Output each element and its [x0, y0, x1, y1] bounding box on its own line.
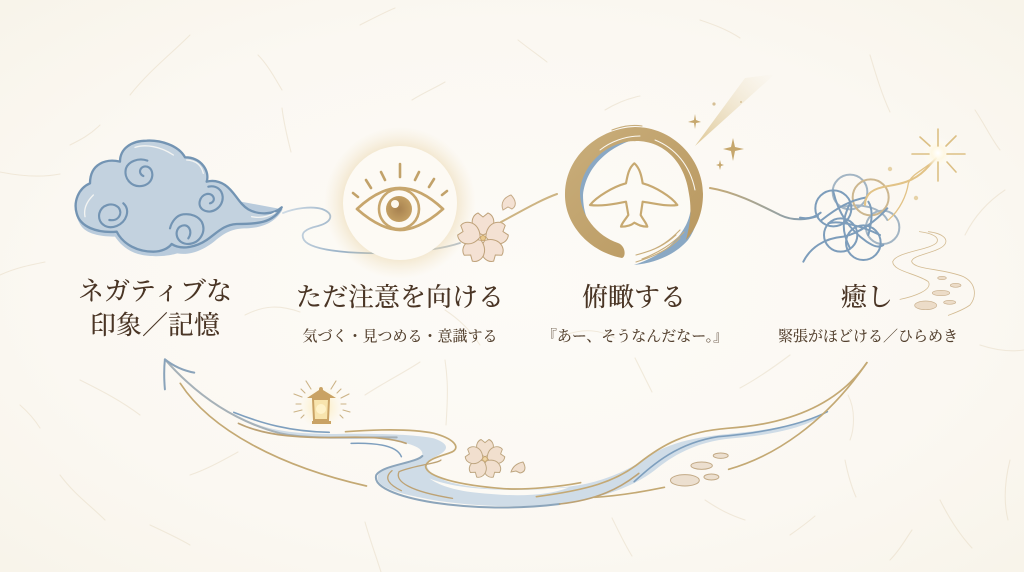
gold strands — [865, 158, 936, 220]
icon: eye — [324, 127, 476, 279]
white inner highlight — [350, 438, 569, 495]
enso blue stroke — [577, 138, 699, 265]
icon: small stream — [893, 232, 974, 315]
eye outline — [357, 188, 443, 230]
icon: lantern — [294, 381, 350, 429]
blue line inner — [351, 443, 401, 457]
connector: blossom to enso — [501, 194, 557, 222]
tan strand loop — [853, 179, 889, 215]
cloud swirls — [99, 160, 223, 244]
cloud highlights — [85, 146, 275, 217]
icon: light beam — [695, 74, 775, 146]
eye disc — [343, 146, 457, 260]
thread: cloud to flower — [283, 208, 460, 253]
thread: enso to knot — [710, 188, 818, 219]
right gold bank — [536, 363, 867, 497]
bird icon — [590, 163, 677, 227]
eye halo — [324, 127, 476, 279]
lantern glow — [299, 385, 343, 429]
step: healing — [778, 283, 958, 345]
eye rays — [353, 164, 447, 197]
stones — [670, 453, 728, 486]
step: bird's-eye view: 『あー、そうなんだなー。』 — [542, 328, 728, 345]
back strands — [833, 175, 899, 244]
return river arrow — [164, 359, 867, 508]
step: just pay attention: ただ注意を向ける — [296, 283, 504, 312]
heading: negative: ネガティブな — [78, 277, 232, 306]
lower blue bank — [376, 456, 560, 508]
enso brush streaks — [612, 125, 684, 262]
icon: sparkles — [688, 101, 744, 170]
icon: petal lower — [511, 462, 525, 473]
iris — [379, 189, 419, 229]
right blue bank — [634, 412, 827, 482]
heading: negative: 印象／記憶 — [90, 311, 221, 340]
arrow head — [164, 359, 194, 389]
lantern base — [312, 421, 331, 424]
lantern body — [313, 399, 329, 420]
step: just pay attention — [296, 283, 504, 345]
lower right gold lines — [595, 363, 867, 497]
lantern rays — [294, 381, 350, 418]
icon: enso with bird — [565, 125, 703, 265]
icon: cherry blossom lower — [464, 440, 506, 480]
step: just pay attention: 気づく・見つめる・意識する — [302, 327, 498, 345]
cloud body — [76, 141, 282, 252]
icon: petal — [502, 195, 515, 210]
step: bird's-eye view — [542, 283, 728, 345]
outer gold line — [180, 383, 366, 486]
main arrow line — [165, 359, 397, 438]
step: healing: 癒し — [841, 283, 893, 312]
blue line upper — [234, 412, 329, 432]
gold line under — [238, 423, 406, 443]
lantern roof — [307, 387, 336, 398]
enso gold stroke — [565, 127, 703, 258]
inner gold curves — [388, 460, 453, 498]
stones — [915, 276, 961, 310]
icon: cherry blossom — [456, 213, 510, 265]
blue strands — [800, 190, 887, 262]
icon: tangled knot — [800, 158, 936, 262]
step: bird's-eye view: 俯瞰する — [582, 283, 686, 312]
cloud shadow — [76, 187, 283, 256]
icon: cloud — [76, 141, 283, 256]
pupil — [386, 196, 412, 222]
icon: spark burst — [888, 129, 965, 200]
upper gold bank — [346, 430, 581, 489]
heading: negative — [78, 277, 232, 340]
river body — [234, 412, 827, 506]
step: healing: 緊張がほどける／ひらめき — [778, 328, 958, 345]
